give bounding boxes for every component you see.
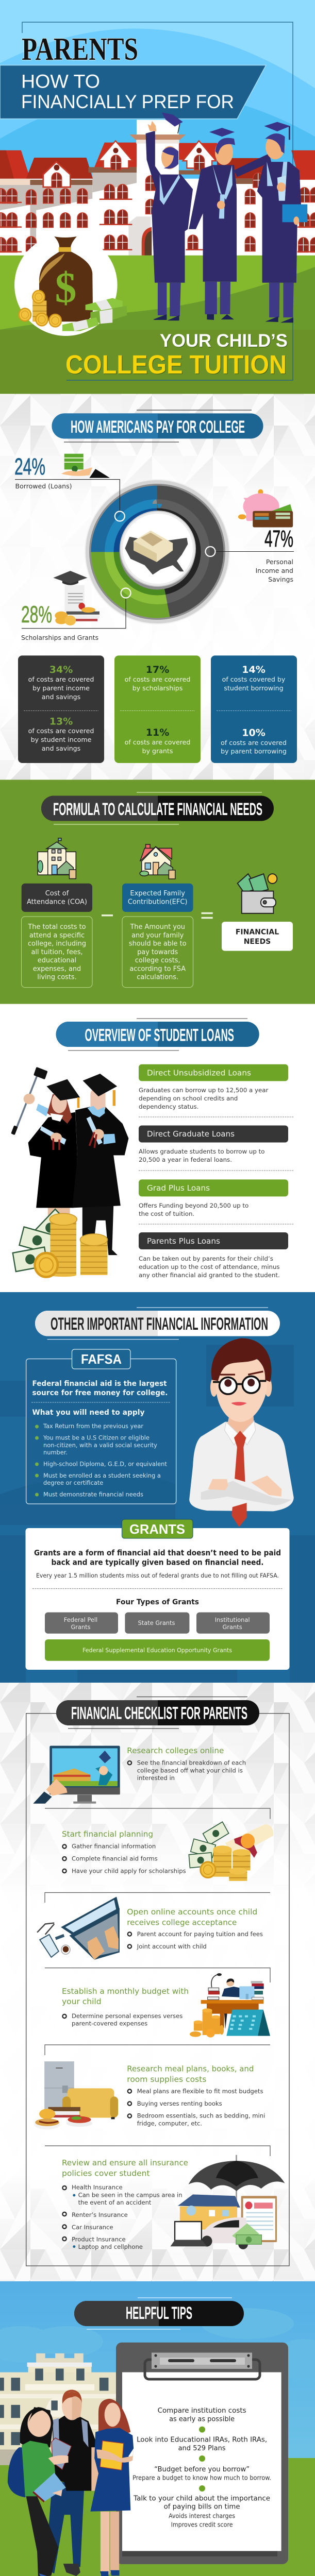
grant type: federal supplemental	[45, 1639, 270, 1661]
grants tag: GRANTS	[129, 1521, 185, 1537]
description: cost of attendance: expenses, and	[33, 965, 81, 973]
panel: FAFSA: What you will need to apply	[32, 1409, 145, 1417]
label: scholarships: Scholarships and Grants	[21, 634, 98, 641]
loan type: direct unsubsidized: depending on school credits and	[139, 1095, 238, 1102]
loan type: parents plus: Can be taken out by parents for their child’s	[139, 1255, 273, 1262]
college building and sky illustration	[0, 28, 315, 394]
icon: cash in hand	[61, 454, 110, 478]
panel: FAFSA: non-citizen, with a valid social security	[43, 1442, 157, 1449]
loan type: direct graduate: Allows graduate students to borrow up to	[139, 1148, 264, 1155]
description: cost of attendance: attend a specific	[29, 931, 85, 940]
description: expected family contribution: calculations.	[137, 974, 178, 981]
loan type: parents plus: Parents Plus Loans	[147, 1236, 220, 1246]
checklist item: online accounts	[127, 1907, 263, 1950]
icon: college with cash	[38, 838, 76, 879]
hero section	[0, 0, 315, 394]
label: personal income	[205, 526, 294, 583]
panel: FAFSA: Federal financial aid is the largest	[32, 1380, 167, 1388]
loan type: direct graduate: 20,500 a year in federal loans.	[139, 1156, 232, 1163]
checklist item: insurance: Product Insurance	[72, 2236, 126, 2243]
illustration: laptop with hands	[37, 1896, 120, 1960]
result box: financial needs	[222, 922, 293, 951]
panel: FAFSA: source for free money for college.	[32, 1389, 168, 1397]
clipboard clip	[145, 2352, 260, 2379]
stat card: green: of costs are covered	[125, 738, 190, 746]
label: borrowed: 24%	[14, 453, 45, 480]
stat card: green: 17%	[146, 664, 169, 675]
checklist item: research colleges: See the financial breakdown of each	[137, 1759, 246, 1766]
section: formula	[0, 780, 315, 1004]
panel: clipboard with tips: Prepare a budget to know how much to borrow.	[132, 2474, 271, 2481]
loan type: parents plus	[139, 1232, 288, 1279]
grant type boxes: Federal Pell	[64, 1616, 97, 1623]
loan type: direct graduate	[139, 1125, 294, 1171]
description: cost of attendance: living costs.	[37, 974, 77, 981]
icon: wallet with money	[238, 874, 277, 913]
stat card: blue: by parent borrowing	[221, 747, 287, 755]
label: borrowed	[14, 453, 125, 521]
box: expected family contribution: Expected Family	[130, 890, 185, 897]
loan type: parents plus: any other financial aid granted to the student.	[139, 1272, 280, 1279]
illustration: monitor with graduate	[33, 1745, 120, 1804]
stat card: dark: 13%	[49, 716, 73, 727]
checklist frame	[26, 1714, 289, 2266]
label: personal income: Personal	[266, 558, 293, 566]
grant type boxes: Institutional	[215, 1616, 250, 1623]
description: cost of attendance: educational	[38, 957, 76, 964]
checklist item: meal plans: room supplies costs	[127, 2075, 206, 2084]
panel: clipboard with tips	[116, 2343, 288, 2564]
label: borrowed: Borrowed (Loans)	[15, 482, 72, 490]
panel: FAFSA: number.	[43, 1449, 68, 1456]
section: other financial information	[0, 1292, 315, 1683]
money bag with coins and cash	[14, 234, 127, 336]
checklist item: financial planning: Complete financial aid forms	[72, 1855, 158, 1862]
description: expected family contribution: The Amount you	[129, 923, 185, 931]
checklist item: meal plans: Bedroom essentials, such as bedding, mini	[137, 2112, 265, 2120]
description: expected family contribution: college costs,	[135, 957, 180, 964]
stat card: green: 11%	[146, 727, 169, 738]
stat card: blue	[211, 655, 297, 763]
checklist item: financial planning: Gather financial information	[72, 1843, 156, 1850]
panel: grants: Four Types of Grants	[116, 1598, 199, 1606]
checklist item: insurance: Laptop and cellphone	[78, 2243, 143, 2250]
title banner: FINANCIALLY PREP FOR	[21, 91, 234, 112]
subtitle: YOUR CHILD’S	[160, 331, 288, 351]
background room shapes	[0, 1345, 315, 1683]
checklist item: financial planning: Have your child apply for scholarships	[72, 1868, 186, 1875]
grant type boxes: Grants	[223, 1623, 242, 1631]
checklist item: online accounts: receives college acceptance	[127, 1918, 237, 1927]
panel: FAFSA: Must demonstrate financial needs	[43, 1491, 143, 1498]
checklist item: insurance: Car Insurance	[72, 2224, 113, 2231]
stat card: dark: 34%	[49, 664, 73, 675]
description: expected family contribution: should be able to	[129, 940, 187, 948]
illustration: student at desk with coins and calendar	[190, 1973, 270, 2038]
label: personal income: Savings	[268, 575, 293, 583]
heading pill: HELPFUL TIPS	[126, 2303, 192, 2323]
stat card: dark: and savings	[42, 693, 80, 701]
box: cost of attendance: Attendance (COA)	[27, 898, 87, 906]
stat card: green: by scholarships	[132, 684, 183, 692]
label: scholarships: 28%	[21, 601, 52, 628]
footer	[0, 2573, 315, 2576]
box: cost of attendance	[22, 884, 92, 912]
panel: clipboard with tips: Avoids interest charges	[169, 2512, 235, 2519]
checklist item: meal plans: fridge, computer, etc.	[137, 2120, 202, 2127]
illustration: three students	[8, 2389, 134, 2576]
panel: clipboard with tips: and 529 Plans	[178, 2444, 226, 2452]
grant type boxes	[45, 1613, 270, 1634]
panel: FAFSA: High-school Diploma, G.E.D, or equivalent	[43, 1461, 167, 1468]
checklist item: insurance: Health Insurance	[72, 2183, 123, 2191]
checklist item: research colleges: college based off what your child is	[137, 1767, 243, 1774]
label: personal income: 47%	[264, 526, 293, 552]
section: how Americans pay	[0, 394, 315, 780]
checklist item: insurance: Can be seen in the campus area in	[78, 2191, 183, 2198]
loan type: grad plus: the cost of tuition.	[139, 1210, 194, 1217]
heading pill	[35, 1311, 280, 1336]
redraw student shoes over footer edge	[27, 2573, 58, 2576]
panel: grants: back and are typically given based on financial need.	[52, 1558, 264, 1567]
FAFSA tag: FAFSA	[81, 1351, 122, 1367]
grant type boxes: State Grants	[138, 1619, 175, 1626]
checklist item: research colleges	[127, 1746, 246, 1782]
result box: financial needs: FINANCIAL	[236, 928, 279, 937]
panel: FAFSA: You must be a U.S Citizen or eligible	[43, 1434, 150, 1442]
panel: grants	[26, 1519, 290, 1670]
box: cost of attendance: Cost of	[45, 890, 69, 897]
panel: clipboard with tips: Improves credit score	[171, 2521, 233, 2528]
subtitle: COLLEGE TUITION	[65, 350, 287, 379]
frame line	[22, 22, 293, 380]
checklist item: online accounts: Open online accounts once child	[127, 1907, 257, 1917]
checklist item: financial planning: Start financial planning	[62, 1829, 153, 1839]
checklist item: insurance: Renter’s Insurance	[72, 2211, 128, 2218]
description: cost of attendance: The total costs to	[27, 923, 86, 931]
equals sign	[201, 913, 213, 918]
panel: FAFSA: degree or certificate	[43, 1479, 103, 1486]
grant type boxes: Grants	[71, 1623, 91, 1631]
stat card: dark: of costs are covered	[28, 727, 94, 735]
panel: clipboard with tips: Look into Educational IRAs, Roth IRAs,	[137, 2436, 267, 2444]
checklist item: monthly budget: your child	[62, 1997, 102, 2006]
checklist item: insurance: the event of an accident	[78, 2199, 152, 2206]
heading pill	[74, 2301, 244, 2326]
description: cost of attendance: college, including	[28, 940, 86, 948]
stat card: blue: 14%	[242, 664, 266, 675]
box: expected family contribution	[122, 884, 193, 912]
checklist item: meal plans: Meal plans are flexible to fit most budgets	[137, 2088, 263, 2095]
description: expected family contribution: pay towards	[137, 948, 178, 956]
loan type: grad plus: Offers Funding beyond 20,500 up to	[139, 1202, 248, 1209]
checklist item: insurance	[62, 2158, 188, 2250]
label: personal income: Income and	[256, 567, 293, 574]
stat card: dark: by student income	[31, 736, 92, 743]
illustration: man with glasses	[189, 1338, 294, 1527]
title banner	[0, 65, 266, 119]
heading pill	[52, 413, 263, 438]
icon: cap, diploma, coins and books	[53, 571, 100, 625]
stat card: dark: of costs are covered	[28, 675, 94, 683]
panel: FAFSA: Tax Return from the previous year	[43, 1422, 143, 1430]
loan type: grad plus	[139, 1179, 294, 1224]
stat card: blue: of costs covered by	[222, 675, 286, 683]
subtitle	[65, 331, 288, 379]
map and capitol icon	[125, 531, 188, 574]
checklist item: meal plans	[127, 2064, 265, 2127]
heading pill	[56, 1700, 259, 1725]
checklist item: research colleges: interested in	[137, 1774, 175, 1782]
checklist item: monthly budget: parent-covered expenses	[72, 2020, 147, 2027]
description: cost of attendance	[22, 917, 92, 988]
panel: FAFSA	[26, 1349, 176, 1504]
checklist item: meal plans: Research meal plans, books, and	[127, 2064, 254, 2073]
panel: grants: Every year 1.5 million students miss out of federal grants due to not filling out FAFSA.	[36, 1572, 279, 1579]
illustration: umbrella over house, car, laptop and policy	[170, 2155, 285, 2249]
icon: piggy bank and wallet	[238, 489, 293, 528]
description: expected family contribution: according to FSA	[129, 965, 186, 973]
description: expected family contribution: and your family	[131, 931, 184, 940]
stat card: blue: student borrowing	[224, 684, 284, 692]
stat card: green: of costs are covered	[125, 675, 190, 683]
checklist item: financial planning	[62, 1829, 186, 1875]
checklist item: online accounts: Parent account for paying tuition and fees	[137, 1930, 263, 1938]
stat card: blue: 10%	[242, 727, 266, 739]
checklist item: monthly budget	[62, 1987, 189, 2027]
icon: house with cash	[140, 844, 175, 879]
title word: parents: PARENTS	[22, 32, 138, 67]
FAFSA tag	[72, 1349, 130, 1369]
stat card: dark: and savings	[42, 744, 80, 752]
section: helpful tips	[0, 2281, 315, 2576]
checklist item: research colleges: Research colleges online	[127, 1746, 224, 1755]
stat card: green: by grants	[142, 747, 173, 755]
panel: clipboard with tips: “Budget before you borrow”	[154, 2465, 250, 2473]
loan type: direct unsubsidized: Direct Unsubsidized Loans	[147, 1068, 251, 1077]
heading pill	[56, 1022, 259, 1047]
panel: clipboard with tips: Talk to your child about the importance	[133, 2495, 270, 2503]
grant type: federal supplemental: Federal Supplemental Education Opportunity Grants	[82, 1647, 232, 1654]
loan type: direct graduate: Direct Graduate Loans	[147, 1129, 235, 1139]
illustration: fridge, sofa, books and food	[34, 2061, 118, 2129]
grants tag	[122, 1519, 193, 1538]
panel: FAFSA: Must be enrolled as a student seeking a	[43, 1472, 161, 1479]
loan type: direct unsubsidized: dependency status.	[139, 1103, 198, 1110]
stat card: dark	[18, 655, 104, 763]
loan type: grad plus: Grad Plus Loans	[147, 1183, 210, 1193]
result box: financial needs: NEEDS	[244, 938, 271, 946]
section: financial checklist	[0, 1683, 315, 2281]
stat card: blue: of costs are covered	[221, 739, 287, 747]
box: expected family contribution: Contribution(EFC)	[128, 898, 188, 906]
minus sign	[102, 914, 113, 916]
panel: grants: Grants are a form of financial aid that doesn’t need to be paid	[34, 1548, 281, 1557]
description: cost of attendance: all tuition, fees,	[31, 948, 83, 956]
label: scholarships	[21, 588, 131, 641]
heading pill	[41, 795, 274, 821]
checklist item: insurance: policies cover student	[62, 2169, 150, 2178]
loan type: parents plus: education up to the cost of attendance, minus	[139, 1263, 280, 1270]
checklist item: insurance: Review and ensure all insurance	[62, 2158, 188, 2167]
stat card: green	[114, 655, 201, 763]
checklist item: online accounts: Joint account with child	[137, 1943, 207, 1950]
panel: clipboard with tips: of paying bills on time	[164, 2503, 240, 2511]
illustration: money and diploma	[189, 1822, 273, 1881]
donut chart	[85, 480, 229, 624]
loan type: direct unsubsidized	[139, 1064, 294, 1117]
dollar sign: $	[55, 264, 76, 312]
stat card: dark: by parent income	[32, 684, 90, 692]
graduates illustration	[146, 112, 307, 323]
checklist item: monthly budget: Establish a monthly budget with	[62, 1987, 189, 1996]
description: expected family contribution	[122, 917, 193, 988]
title banner: HOW TO	[21, 71, 100, 92]
graduates selfie illustration with money	[11, 1067, 128, 1277]
illustration: college building	[0, 2353, 117, 2467]
checklist item: meal plans: Buying verses renting books	[137, 2100, 222, 2107]
clouds	[0, 2308, 315, 2380]
panel: clipboard with tips: as early as possible	[169, 2415, 235, 2424]
section: student loans	[0, 1004, 315, 1293]
loan type: direct unsubsidized: Graduates can borrow up to 12,500 a year	[139, 1087, 268, 1094]
panel: clipboard with tips: Compare institution costs	[158, 2406, 246, 2415]
checklist item: monthly budget: Determine personal expenses verses	[72, 2012, 183, 2020]
